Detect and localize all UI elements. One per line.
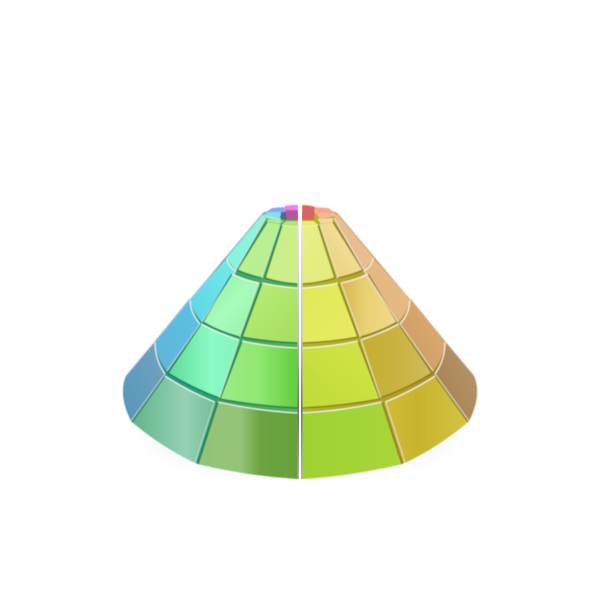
cap: amber segment [317,218,333,224]
segment: outer row 4 [123,342,165,421]
segment: front row 3 [302,341,380,408]
segment: middle row 3 [168,324,239,398]
cap: red segment [302,205,315,220]
cone: left half (cool colours) [123,212,298,479]
segment: front row 1 [265,225,298,284]
segment: outer row 4 [435,342,477,421]
centre seam [298,205,302,479]
segment: middle row 2 [203,274,259,337]
segment: middle row 4 [386,376,468,463]
cap: green segments [267,219,284,224]
cap: yellow segment [302,221,318,226]
ground shadow [130,420,470,472]
segment: front row 2 [302,283,358,343]
segment: front row 3 [220,341,298,408]
segment: middle row 1 [237,222,280,278]
segment: outer row 2 [364,258,410,322]
cap: pink segment [285,205,298,220]
segment: middle row 2 [341,274,397,337]
segment: front row 2 [242,283,298,343]
top cap: small colour ring [263,205,337,226]
segment: outer row 1 [334,214,373,270]
segment: outer row 1 [227,214,266,270]
cap: blue segments [263,207,286,220]
cone: right half (warm colours) [302,212,477,479]
segment: front row 4 [302,402,402,479]
segment: front row 1 [302,225,335,284]
segment: outer row 3 [155,298,200,371]
cap: dark recess [280,212,287,220]
segment: outer row 2 [190,258,236,322]
segment: middle row 1 [320,222,363,278]
segment: middle row 4 [132,376,214,463]
cap: teal segment [263,214,281,221]
cap: orange segments [315,207,337,219]
segment: outer row 3 [400,298,445,371]
segment: front row 4 [198,402,298,479]
segment: middle row 3 [361,324,432,398]
